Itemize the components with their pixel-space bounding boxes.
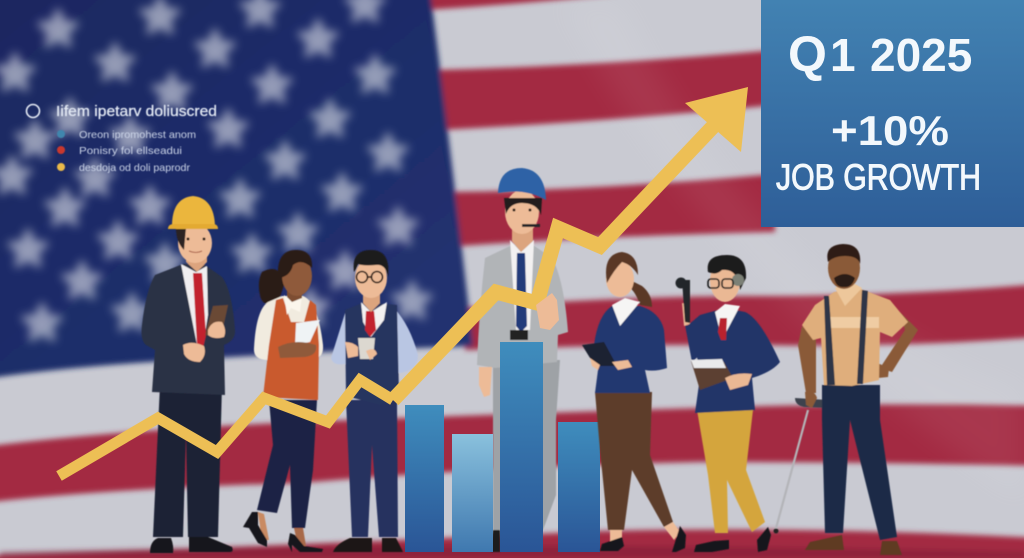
worker 1: man in suit and yellow hard hat xyxy=(142,196,235,553)
worker 3: man with glasses and vest xyxy=(331,250,418,552)
legend item: blue: Oreon ipromohest anom xyxy=(79,129,196,141)
legend item: yellow: desdoja od doli paprodr xyxy=(79,162,191,174)
quarter heading: 1 xyxy=(830,29,856,81)
bar 2 xyxy=(452,434,493,552)
bar 3 xyxy=(500,342,543,552)
bar 1 xyxy=(405,405,444,552)
worker 4 hand over arrow xyxy=(536,293,559,330)
stat panel xyxy=(761,0,1024,227)
bar 4 xyxy=(558,422,600,552)
rising growth arrow xyxy=(59,87,748,476)
quarter heading: 2025 xyxy=(870,29,972,81)
legend xyxy=(26,104,217,174)
quarter heading: Q xyxy=(788,26,827,82)
job growth label: JOB GROWTH xyxy=(776,156,981,198)
background: flag stars xyxy=(0,0,430,339)
legend heading: Iifem ipetarv doliuscred xyxy=(56,104,217,120)
worker 7: bearded man with suspenders and cane xyxy=(774,244,918,555)
worker 6: woman with phone handset and clipboard xyxy=(676,255,780,552)
worker 4: man in grey suit and blue hard hat xyxy=(477,168,568,552)
legend ring marker xyxy=(26,104,40,118)
growth percentage: +10% xyxy=(831,107,949,154)
worker 5: woman in navy blazer with tablet xyxy=(582,252,686,552)
worker 2: woman in orange apron xyxy=(243,250,323,552)
bar chart xyxy=(405,342,600,552)
legend item: red: Ponisry fol ellseadui xyxy=(79,145,182,157)
